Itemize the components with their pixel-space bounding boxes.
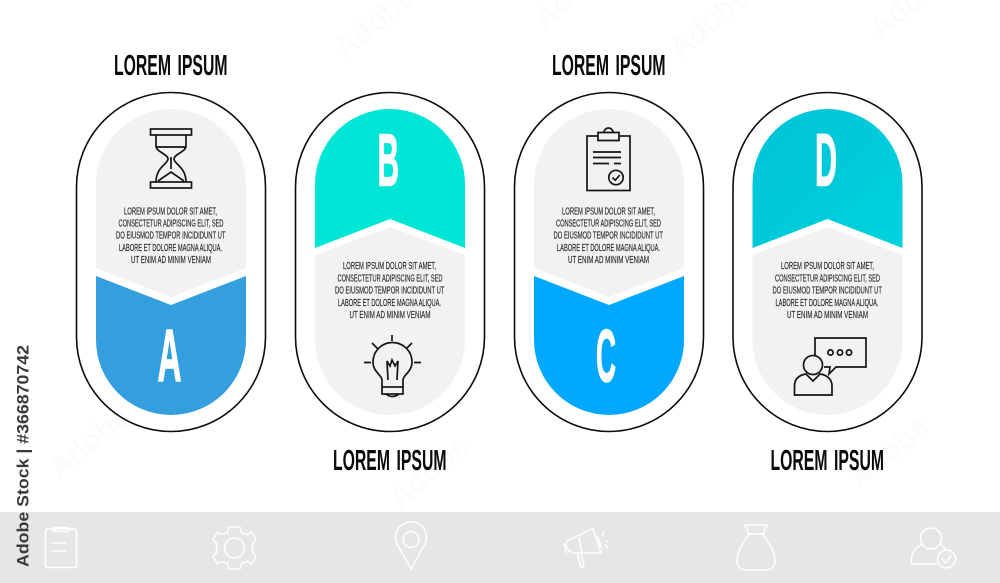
gray top section A bbox=[96, 109, 246, 297]
body text A bbox=[116, 206, 226, 266]
body text D: LABORE ET DOLORE MAGNA ALIQUA. bbox=[776, 298, 878, 309]
body text B: CONSECTETUR ADIPISCING ELIT, SED bbox=[338, 273, 442, 284]
body text C bbox=[554, 206, 663, 266]
body text B: UT ENIM AD MINIM VENIAM bbox=[350, 310, 430, 321]
body text C: DO EIUSMOD TEMPOR INCIDIDUNT UT bbox=[554, 231, 663, 242]
panel: step A bbox=[76, 92, 266, 432]
body text B: LOREM IPSUM DOLOR SIT AMET, bbox=[343, 261, 436, 272]
capsule outline D bbox=[733, 92, 922, 432]
panel: step C: C bbox=[596, 314, 616, 398]
icon: footer location pin bbox=[396, 522, 427, 569]
icon: light bulb bbox=[364, 335, 421, 396]
teal top section D bbox=[752, 109, 902, 248]
capsule outline A bbox=[76, 92, 266, 432]
body text D: LOREM IPSUM DOLOR SIT AMET, bbox=[781, 261, 874, 272]
icon: footer clipboard bbox=[46, 528, 76, 568]
body text C: CONSECTETUR ADIPISCING ELIT, SED bbox=[556, 218, 661, 230]
capsule outline C bbox=[514, 92, 704, 432]
body text D bbox=[772, 261, 882, 321]
icon: person with speech bubble bbox=[794, 338, 866, 395]
heading C: LOREM IPSUM bbox=[552, 50, 666, 82]
icon: clipboard with check bbox=[587, 128, 630, 190]
footer band bbox=[0, 512, 1000, 583]
icon: footer megaphone bbox=[564, 528, 608, 567]
panel: step D: D bbox=[815, 118, 837, 202]
icon: hourglass bbox=[150, 129, 192, 188]
panel: step C bbox=[514, 92, 704, 432]
watermark pattern: Adobe bbox=[43, 400, 136, 485]
body text A: LABORE ET DOLORE MAGNA ALIQUA. bbox=[119, 243, 222, 254]
heading A: LOREM IPSUM bbox=[114, 50, 228, 82]
body text A: CONSECTETUR ADIPISCING ELIT, SED bbox=[118, 218, 224, 230]
gray top section C bbox=[534, 109, 684, 297]
body text D: CONSECTETUR ADIPISCING ELIT, SED bbox=[775, 273, 880, 284]
gray bottom section B bbox=[315, 227, 465, 415]
icon: footer gear bbox=[213, 527, 256, 569]
body text D: DO EIUSMOD TEMPOR INCIDIDUNT UT bbox=[772, 286, 882, 296]
teal top section B bbox=[315, 109, 465, 248]
panel: step A: A bbox=[158, 314, 182, 397]
body text B bbox=[335, 261, 444, 321]
body text B: LABORE ET DOLORE MAGNA ALIQUA. bbox=[338, 298, 441, 309]
panel: step B: B bbox=[378, 118, 399, 202]
panel: step B bbox=[296, 92, 484, 432]
panel: step D bbox=[733, 92, 922, 432]
heading D: LOREM IPSUM bbox=[770, 445, 884, 477]
vertical stock id label: Adobe Stock | #366870742 bbox=[14, 345, 32, 567]
capsule outline B bbox=[296, 92, 484, 432]
body text B: DO EIUSMOD TEMPOR INCIDIDUNT UT bbox=[335, 286, 444, 296]
body text A: LOREM IPSUM DOLOR SIT AMET, bbox=[124, 206, 217, 218]
watermark pattern: Adobe bbox=[383, 430, 476, 515]
body text A: DO EIUSMOD TEMPOR INCIDIDUNT UT bbox=[116, 231, 226, 242]
body text C: UT ENIM AD MINIM VENIAM bbox=[568, 255, 649, 266]
body text A: UT ENIM AD MINIM VENIAM bbox=[131, 255, 211, 266]
icon: footer user with check bbox=[912, 528, 956, 568]
icon: footer bag bbox=[737, 525, 775, 570]
watermark pattern: Adobe bbox=[843, 410, 936, 495]
blue bottom section A bbox=[96, 276, 246, 415]
body text C: LABORE ET DOLORE MAGNA ALIQUA. bbox=[557, 243, 660, 254]
heading B: LOREM IPSUM bbox=[333, 445, 446, 477]
body text C: LOREM IPSUM DOLOR SIT AMET, bbox=[562, 206, 655, 218]
body text D: UT ENIM AD MINIM VENIAM bbox=[787, 310, 868, 321]
gray bottom section D bbox=[752, 227, 902, 415]
blue bottom section C bbox=[534, 276, 684, 415]
